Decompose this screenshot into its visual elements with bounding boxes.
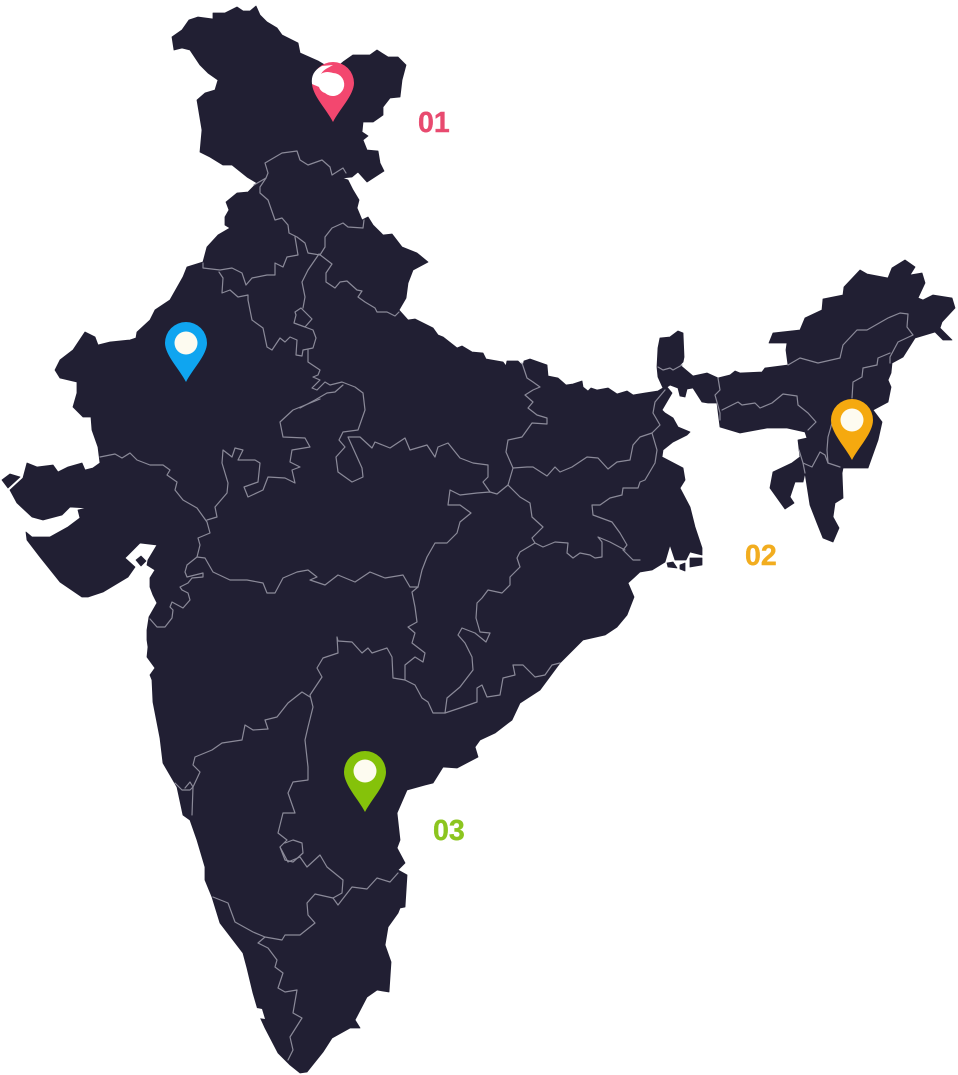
map: state borders <box>100 151 913 1060</box>
map: coast notch <box>257 1008 265 1019</box>
pin: pink, north <box>312 62 354 122</box>
pin: orange, north-east <box>831 399 873 460</box>
pin: green, south <box>344 751 386 812</box>
pin: blue, west <box>165 322 207 382</box>
label: 03: 03 <box>433 815 465 847</box>
label: 01: 01 <box>418 107 450 139</box>
label: 02: 02 <box>745 540 777 572</box>
